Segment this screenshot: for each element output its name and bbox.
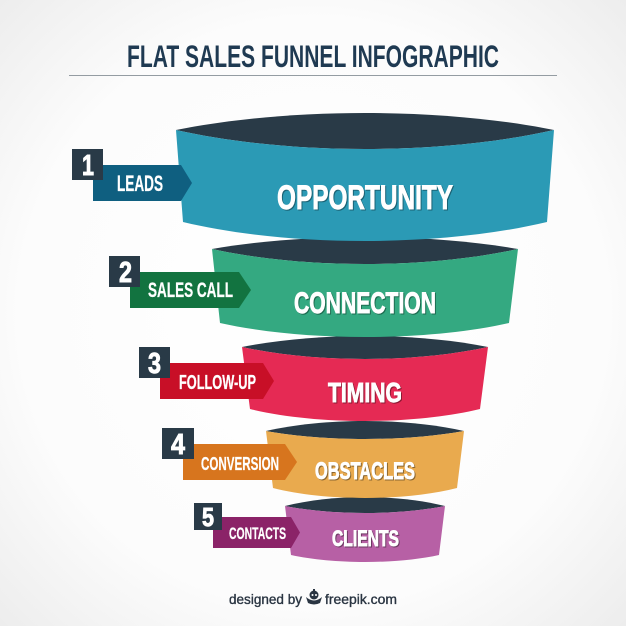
funnel band 1: opportunity: OPPORTUNITY	[277, 179, 453, 217]
funnel band 5: clients: CLIENTS	[333, 527, 400, 552]
funnel band 2: connection: CONNECTION	[295, 288, 437, 321]
label 1: leads: LEADS	[117, 171, 163, 196]
funnel band 4: obstacles: OBSTACLES	[316, 459, 416, 486]
funnel band 3: timing	[242, 336, 488, 421]
label 4: conversion: 4	[171, 429, 185, 461]
label 5: contacts	[194, 502, 300, 548]
funnel band 3: timing: TIMING	[328, 377, 402, 408]
footer credit: freepik.com	[325, 592, 397, 607]
funnel band 5: clients	[285, 497, 445, 562]
funnel band 4: obstacles: OBSTACLES	[315, 458, 415, 485]
funnel band 3: timing: TIMING	[329, 378, 403, 409]
label 2: sales call	[109, 256, 251, 308]
funnel band 1: opportunity	[176, 113, 554, 241]
label 1: leads: 1	[82, 150, 94, 182]
label 3: follow-up	[139, 347, 274, 399]
label 4: conversion	[162, 428, 297, 480]
footer credit	[229, 589, 397, 607]
icon: freepik logo	[306, 589, 322, 604]
label 3: follow-up: 3	[148, 348, 161, 380]
label 5: contacts: 5	[202, 502, 214, 532]
label 5: contacts: CONTACTS	[229, 525, 286, 543]
funnel band 4: obstacles	[266, 421, 464, 498]
label 2: sales call: SALES CALL	[148, 279, 233, 302]
label 3: follow-up: FOLLOW-UP	[179, 372, 256, 394]
funnel band 1: opportunity: OPPORTUNITY	[278, 180, 454, 218]
footer credit: designed by	[229, 592, 302, 607]
funnel band 2: connection	[212, 237, 518, 337]
label 2: sales call: 2	[119, 257, 132, 289]
funnel band 5: clients: CLIENTS	[332, 526, 399, 551]
label 4: conversion: CONVERSION	[201, 454, 279, 474]
label 1: leads	[72, 149, 192, 201]
funnel band 2: connection: CONNECTION	[294, 287, 436, 320]
